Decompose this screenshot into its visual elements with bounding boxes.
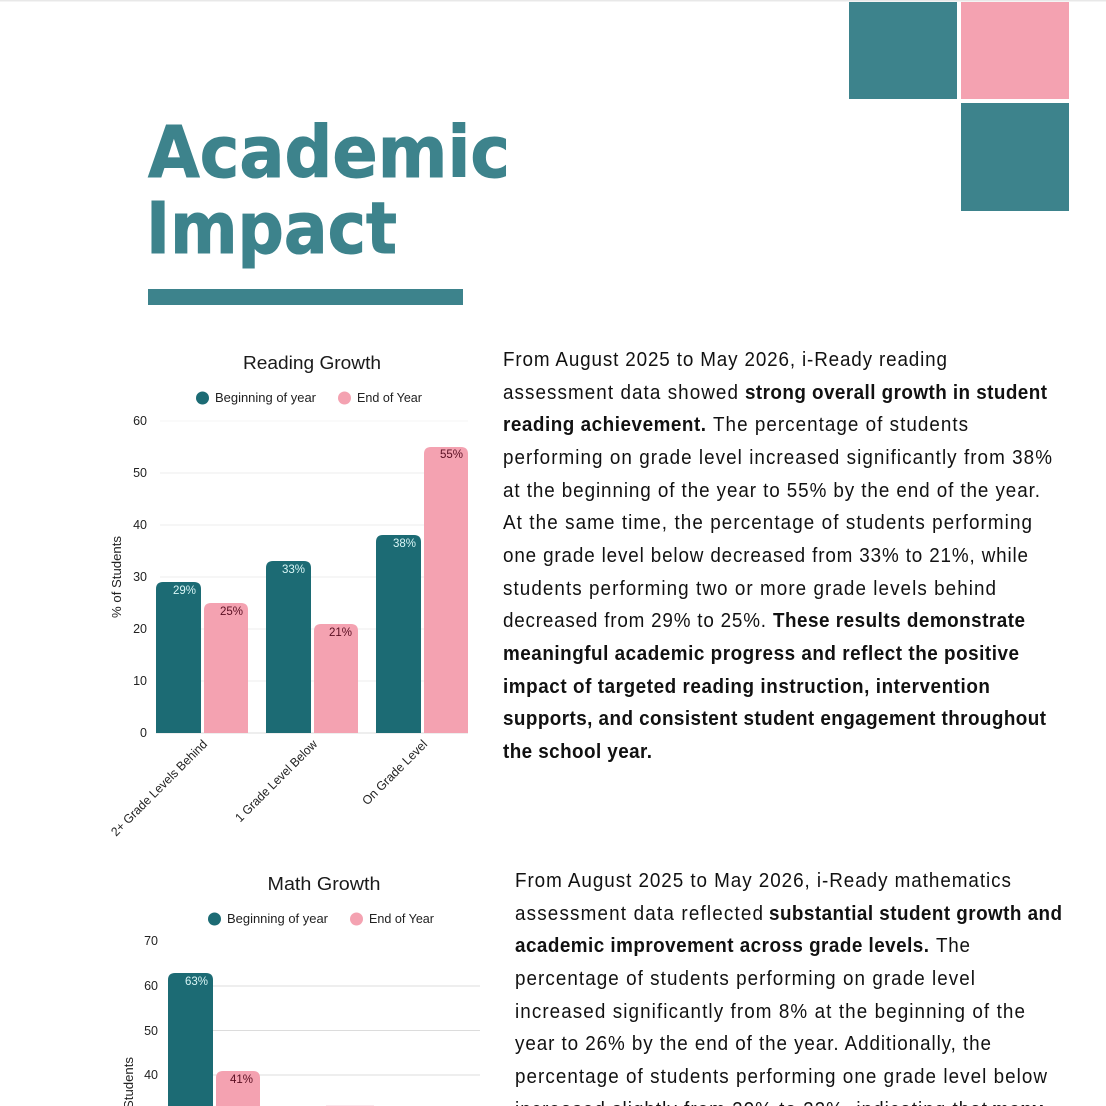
title: Impact — [146, 188, 397, 271]
text block: reading summary: supports, and consistent student engagement throughout — [503, 707, 1046, 730]
text block: math summary: From August 2025 to May 2026, i-Ready mathematics — [515, 869, 1011, 892]
title: Academic — [148, 112, 510, 194]
text block: reading summary: reading achievement. — [503, 413, 706, 436]
bars: math chart: 63% — [185, 976, 208, 988]
text block: reading summary: At the same time, the percentage of students performing — [503, 511, 1032, 534]
legend: reading chart: End of Year — [357, 391, 422, 405]
text block: math summary: assessment data reflected — [515, 902, 763, 925]
chart title: Reading Growth: Reading Growth — [243, 353, 381, 373]
text block: math summary: academic improvement across grade levels. — [515, 934, 929, 957]
legend: math chart: End of Year — [369, 912, 434, 926]
text block: reading summary: impact of targeted reading instruction, intervention — [503, 675, 990, 698]
text block: math summary: increased significantly from 8% at the beginning of the — [515, 1000, 1025, 1023]
legend: math chart: Beginning of year — [227, 912, 328, 926]
chart title: Math Growth: Math Growth — [268, 874, 380, 894]
text block: reading summary: The percentage of students — [713, 413, 968, 436]
text block: math summary: percentage of students performing one grade level below — [515, 1065, 1048, 1088]
y axis labels: reading chart: 60 — [133, 414, 147, 428]
y axis labels: reading chart: % of Students — [110, 536, 124, 618]
title underline bar — [148, 289, 463, 305]
x axis labels: reading chart — [108, 737, 430, 839]
y axis labels: reading chart: 20 — [133, 622, 147, 636]
y axis labels: math chart: 50 — [144, 1024, 158, 1038]
text block: reading summary: decreased from 29% to 25%. — [503, 609, 766, 632]
text block: reading summary: assessment data showed — [503, 381, 738, 404]
text block: reading summary — [503, 348, 1052, 763]
y axis labels: math chart: 40 — [144, 1068, 158, 1082]
bars: reading chart: 38% — [393, 538, 416, 550]
y axis labels: reading chart: 40 — [133, 518, 147, 532]
text block: reading summary: performing on grade level increased significantly from 38% — [503, 446, 1052, 469]
text block: reading summary: meaningful academic progress and reflect the positive — [503, 642, 1019, 665]
chart: Reading Growth — [108, 353, 468, 839]
legend: reading chart — [196, 391, 422, 405]
text block: math summary: percentage of students performing on grade level — [515, 967, 975, 990]
text block: reading summary: students performing two or more grade levels behind — [503, 577, 996, 600]
y axis labels: math chart — [122, 934, 158, 1106]
text block: reading summary: the school year. — [503, 740, 652, 763]
x axis labels: reading chart: On Grade Level — [359, 737, 430, 808]
bars: math chart — [168, 973, 374, 1106]
legend: math chart — [208, 912, 434, 926]
y axis labels: reading chart: 30 — [133, 570, 147, 584]
bars: reading chart: 25% — [220, 606, 243, 618]
y axis labels: reading chart: 10 — [133, 674, 147, 688]
y axis labels: reading chart: 0 — [140, 726, 147, 740]
text block: math summary: substantial student growth and — [769, 902, 1062, 925]
x axis labels: reading chart: 1 Grade Level Below — [232, 737, 321, 825]
legend: reading chart: Beginning of year — [215, 391, 316, 405]
bars: reading chart: 55% — [440, 449, 463, 461]
text block: reading summary: From August 2025 to May 2026, i-Ready reading — [503, 348, 947, 371]
y axis labels: math chart: 60 — [144, 979, 158, 993]
bars: math chart: 41% — [230, 1074, 253, 1086]
text block: reading summary: at the beginning of the year to 55% by the end of the year. — [503, 479, 1040, 502]
text block: reading summary: one grade level below decreased from 33% to 21%, while — [503, 544, 1028, 567]
y axis labels: reading chart — [110, 414, 147, 740]
text block: reading summary: strong overall growth in student — [745, 381, 1047, 404]
decorative colour squares — [849, 2, 1069, 211]
bars: reading chart: 33% — [282, 564, 305, 576]
bars: reading chart — [156, 447, 468, 733]
x axis labels: reading chart: 2+ Grade Levels Behind — [108, 737, 210, 839]
bars: reading chart: 21% — [329, 627, 352, 639]
text block: math summary: year to 26% by the end of the year. Additionally, the — [515, 1032, 991, 1055]
bars: reading chart: 29% — [173, 585, 196, 597]
y axis labels: reading chart: 50 — [133, 466, 147, 480]
text block: reading summary: These results demonstrate — [773, 609, 1025, 632]
y axis labels: math chart: 70 — [144, 934, 158, 948]
text block: math summary — [515, 869, 1062, 1106]
text block: math summary: The — [936, 934, 970, 957]
chart: Math Growth — [122, 874, 480, 1106]
title — [146, 112, 510, 271]
